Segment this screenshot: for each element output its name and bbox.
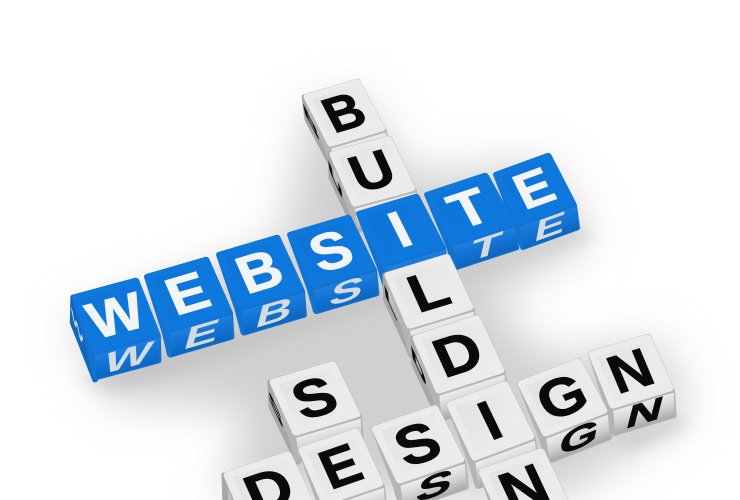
cube: G <box>511 359 620 465</box>
cube: E (last): E <box>504 157 564 221</box>
cube: E <box>138 258 242 359</box>
cube: U: U <box>327 155 344 206</box>
cube: S (above DESIGN row): S <box>282 365 347 432</box>
cube: N: N <box>622 390 667 436</box>
cube: W: W <box>99 334 158 382</box>
cube: D <box>214 451 326 500</box>
cube: E (last): E <box>532 203 569 249</box>
cube: I (crossing) <box>440 382 546 487</box>
cube: E <box>292 428 394 500</box>
cube: L: L <box>383 279 398 326</box>
cube: D: D <box>423 318 492 390</box>
cube: S (above DESIGN row): S <box>267 385 284 435</box>
cube: S: S <box>326 269 368 314</box>
cube: L: L <box>399 259 459 324</box>
cube: B (BUILDING): B <box>313 82 376 144</box>
soft shadows <box>70 95 690 500</box>
cube: T: T <box>438 177 500 240</box>
cube: E (last) <box>487 153 587 252</box>
cube: D <box>403 315 515 422</box>
cube: N <box>581 333 684 438</box>
cube: N: N <box>599 337 662 405</box>
cube: T: T <box>467 225 506 269</box>
cube: I <box>350 194 455 290</box>
cube: T <box>418 173 527 272</box>
cube: W: W <box>79 281 154 350</box>
cube: S (above DESIGN row) <box>260 361 371 462</box>
cube: B <box>209 235 315 338</box>
cube: B (BUILDING) <box>296 79 396 171</box>
cube: I (crossing): I <box>469 390 512 452</box>
cube: E: E <box>157 261 219 327</box>
cube: D: D <box>410 339 428 394</box>
cube: S <box>280 214 387 316</box>
cube: B (BUILDING): B <box>301 98 321 147</box>
cube: U <box>321 136 425 233</box>
cube: B: B <box>252 289 297 336</box>
cube: I: I <box>379 201 421 258</box>
cube: S <box>364 404 477 500</box>
word: WEBSITE <box>64 153 587 383</box>
cube: W <box>64 280 169 383</box>
cube: B: B <box>227 238 292 305</box>
cube: S: S <box>299 218 362 283</box>
cube: N (BUILDING bottom) <box>471 448 581 500</box>
cube: U: U <box>340 138 404 203</box>
cube: G: G <box>556 410 603 464</box>
cube: E: E <box>180 312 224 357</box>
cube: E: E <box>310 432 371 500</box>
cube: W: W <box>70 303 84 352</box>
cube: L <box>376 254 483 355</box>
cube: S: S <box>384 409 451 479</box>
cube: G: G <box>527 362 598 433</box>
word: DESIGN <box>214 333 684 500</box>
